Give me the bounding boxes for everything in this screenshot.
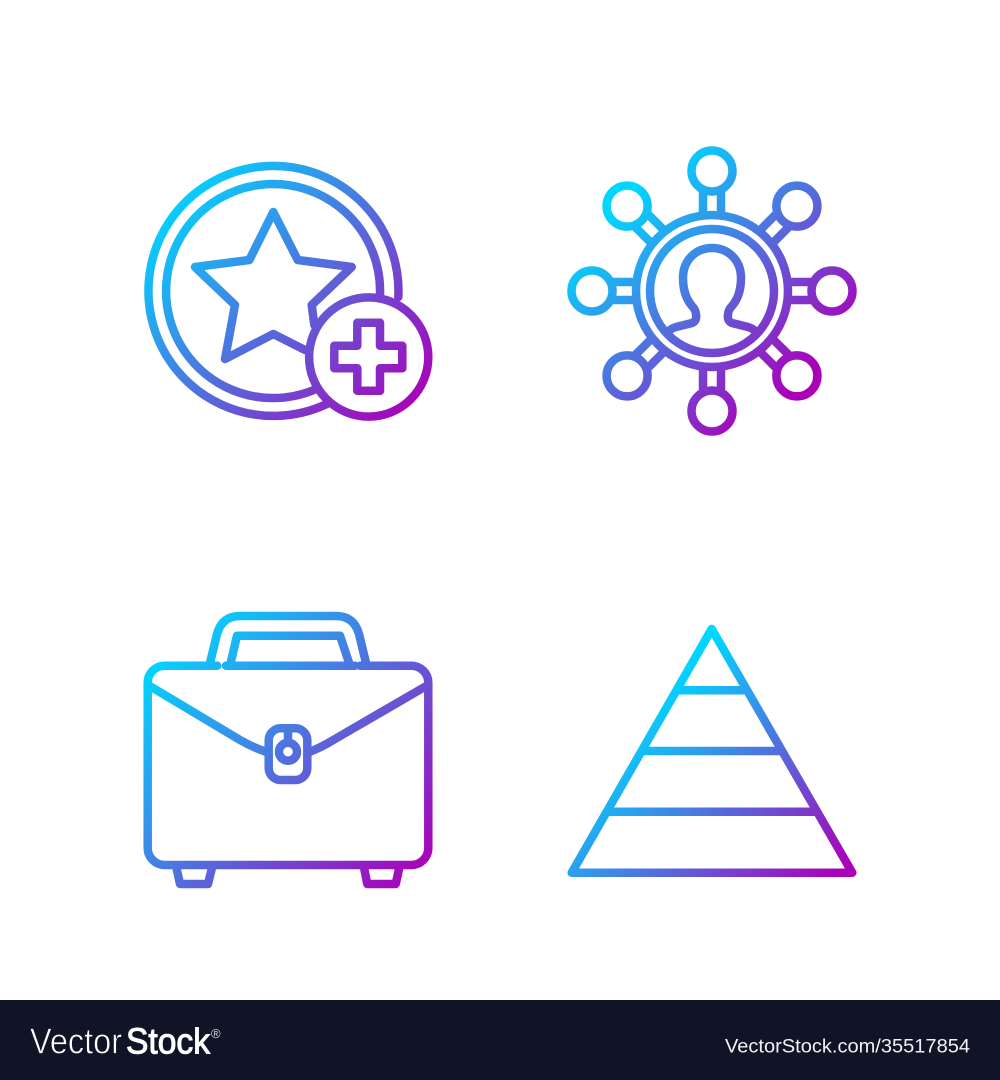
person silhouette (668, 248, 756, 332)
footer image id: VectorStock.com/35517854 (725, 1036, 970, 1057)
pyramid levels (607, 690, 817, 812)
outer handle (210, 616, 366, 663)
outer ring (636, 215, 788, 367)
icon: briefcase (148, 616, 428, 884)
plus circle (309, 297, 428, 417)
plus sign (334, 323, 402, 391)
inner ring (166, 184, 380, 398)
connectors (612, 191, 812, 391)
clasp button (279, 743, 297, 761)
inner handle (230, 636, 350, 666)
star (195, 212, 352, 359)
case top edge (226, 661, 355, 670)
icon: pyramid chart (572, 629, 852, 873)
registered mark: ® (211, 1026, 221, 1041)
logo word: Vector: Vector (30, 1020, 122, 1061)
footer bar (0, 1000, 1000, 1080)
inner ring (650, 229, 774, 353)
clasp (269, 728, 307, 780)
triangle (572, 629, 852, 873)
icon: person network (572, 150, 852, 432)
feet (177, 869, 399, 884)
logo word: Stock: Stock (126, 1020, 211, 1061)
outer ring (148, 166, 398, 416)
case body (148, 666, 428, 865)
footer logo (30, 1020, 221, 1061)
flap (148, 685, 428, 752)
satellite nodes (572, 150, 852, 432)
icon: star badge with plus (148, 166, 428, 417)
